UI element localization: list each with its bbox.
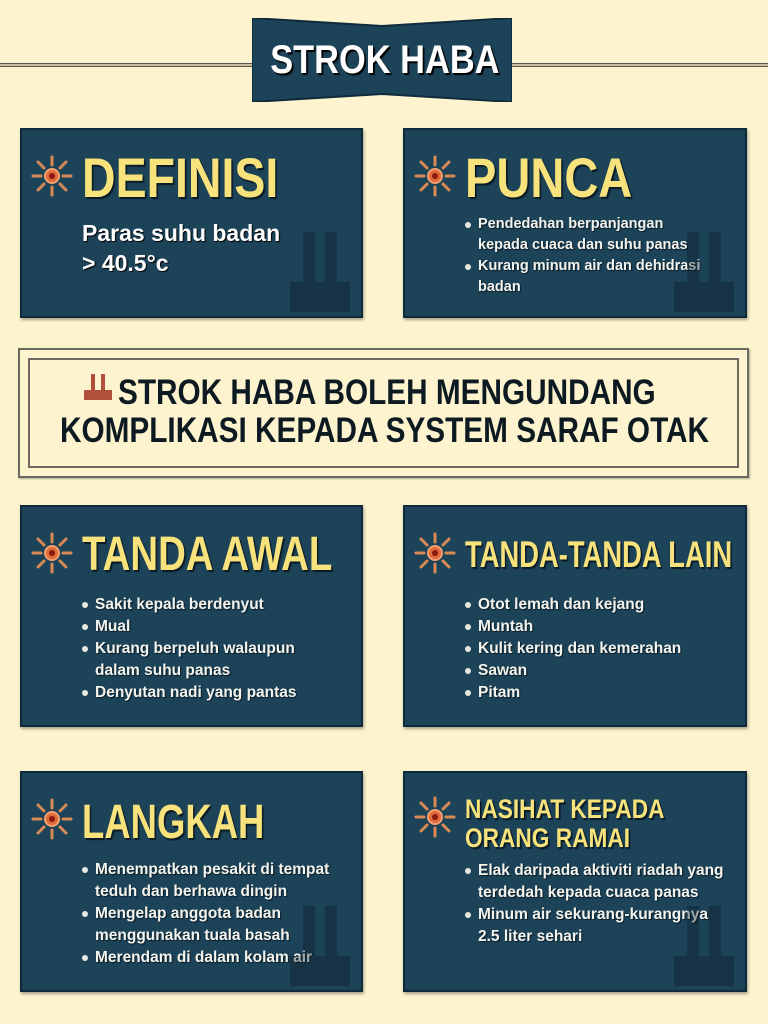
text [82, 220, 280, 276]
list: Kulit kering dan kemerahan [478, 640, 681, 657]
list: Sakit kepala berdenyut [95, 596, 264, 613]
panel: nasihat [403, 771, 747, 992]
list: badan [478, 279, 521, 295]
panel: tanda awal [20, 505, 363, 727]
list: Sawan [478, 662, 527, 679]
heading: NASIHAT KEPADA [465, 794, 665, 824]
list [465, 216, 701, 295]
list: Otot lemah dan kejang [478, 596, 644, 613]
icon: towers [84, 374, 112, 400]
text: Paras suhu badan [82, 220, 280, 246]
list: Mengelap anggota badan [95, 905, 281, 922]
callout: komplikasi: STROK HABA BOLEH MENGUNDANG [118, 373, 656, 412]
list: Merendam di dalam kolam air [95, 949, 312, 966]
list [465, 596, 682, 701]
list [465, 862, 724, 945]
heading: TANDA-TANDA LAIN [465, 534, 732, 575]
panel: punca [403, 128, 747, 318]
panel: tanda-tanda lain [403, 505, 747, 727]
text: > 40.5°c [82, 250, 169, 276]
icon: sun [32, 532, 72, 574]
heading: LANGKAH [82, 796, 264, 849]
list: Minum air sekurang-kurangnya [478, 906, 708, 923]
list: Denyutan nadi yang pantas [95, 684, 297, 701]
title banner [0, 18, 768, 102]
icon: sun [32, 798, 72, 840]
callout: komplikasi: KOMPLIKASI KEPADA SYSTEM SARAF OTAK [60, 411, 709, 450]
icon: sun [32, 156, 72, 196]
list: Kurang minum air dan dehidrasi [478, 258, 700, 274]
list: Menempatkan pesakit di tempat [95, 861, 329, 878]
list: Pitam [478, 684, 520, 701]
list: Kurang berpeluh walaupun [95, 640, 295, 657]
panel: langkah [20, 771, 363, 992]
list: Mual [95, 618, 130, 635]
list: 2.5 liter sehari [478, 928, 582, 945]
list: Pendedahan berpanjangan [478, 216, 663, 232]
list [82, 596, 298, 702]
heading [465, 794, 666, 853]
icon: sun [414, 156, 456, 196]
list: terdedah kepada cuaca panas [478, 884, 699, 901]
list: teduh dan berhawa dingin [95, 883, 287, 900]
icon: sun [414, 796, 456, 838]
list: menggunakan tuala basah [95, 927, 290, 944]
list: Elak daripada aktiviti riadah yang [478, 862, 724, 879]
panel: definisi [20, 128, 363, 318]
heading: ORANG RAMAI [465, 823, 630, 853]
icon: sun [414, 532, 456, 574]
heading: TANDA AWAL [82, 528, 332, 581]
title banner: STROK HABA [270, 38, 500, 82]
list: dalam suhu panas [95, 662, 230, 679]
callout: komplikasi [18, 348, 749, 478]
list: kepada cuaca dan suhu panas [478, 237, 688, 253]
list [82, 861, 330, 966]
heading: DEFINISI [82, 146, 278, 209]
heading: PUNCA [465, 146, 632, 209]
list: Muntah [478, 618, 533, 635]
